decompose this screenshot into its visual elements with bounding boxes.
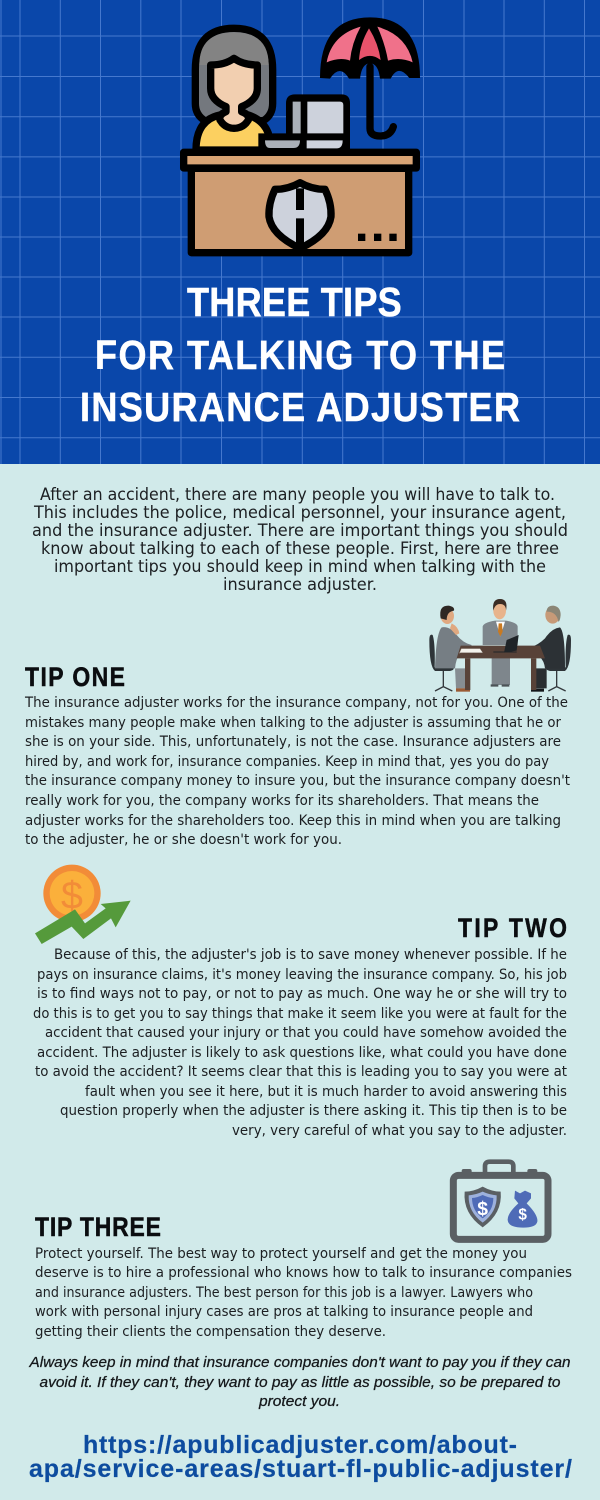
- closing note: Always keep in mind that insurance companies don't want to pay you if they can: [28, 1355, 570, 1371]
- tip two text: very, very careful of what you say to the adjuster.: [232, 1123, 567, 1139]
- intro text: important tips you should keep in mind when talking with the: [54, 557, 546, 577]
- tip two text: question properly when the adjuster is there asking it. This tip then is to be: [60, 1103, 567, 1119]
- tip two text: accident that caused your injury or that you could have somehow avoided the: [45, 1025, 567, 1041]
- tip three text: work with personal injury cases are pros at talking to insurance people and: [35, 1304, 533, 1320]
- tip three text: [35, 1246, 572, 1340]
- tip one text: hired by, and work for, insurance companies. Keep in mind that, yes you do pay: [25, 754, 549, 770]
- table: [457, 635, 545, 690]
- tip two text: do this is to get you to say things that make it seem like you were at fault for the: [33, 1006, 567, 1022]
- icon: briefcase with shield and money bag: [453, 1162, 548, 1239]
- tip two text: [33, 947, 567, 1139]
- tip one text: [24, 695, 570, 848]
- tip one text: adjuster works for the shareholders too. Keep this in mind when you are talking: [25, 813, 561, 829]
- man right: [524, 606, 565, 692]
- shield: [464, 1187, 501, 1227]
- header panel: [0, 0, 600, 464]
- title: [80, 280, 520, 431]
- icon: insurance agent at desk with umbrella: [184, 17, 420, 253]
- icon: coin with rising arrow: [35, 865, 131, 944]
- title: INSURANCE ADJUSTER: [80, 385, 520, 431]
- icon: briefcase with shield and money bag: $: [477, 1199, 488, 1220]
- chairs: [429, 635, 571, 671]
- intro text: know about talking to each of these people. First, here are three: [41, 539, 559, 559]
- tip two text: accident. The adjuster is likely to ask questions like, what could you have done: [37, 1045, 567, 1061]
- dollar sign: $: [61, 873, 83, 917]
- tip two text: Because of this, the adjuster's job is to save money whenever possible. If he: [54, 947, 567, 963]
- arrow: [35, 901, 131, 944]
- icon: business meeting: [429, 599, 571, 692]
- tip one text: The insurance adjuster works for the insurance company, not for you. One of the: [24, 695, 568, 711]
- tip three text: and insurance adjusters. The best person for this job is a lawyer. Lawyers who: [35, 1285, 533, 1301]
- website link: https://apublicadjuster.com/about-: [83, 1431, 517, 1459]
- tip one text: the insurance company money to insure you, but the insurance company doesn't: [25, 773, 570, 789]
- tip two text: pays on insurance claims, it's money leaving the insurance company. So, his job: [37, 967, 567, 983]
- tip two text: to avoid the accident? It seems clear that this is leading you to say you were at: [35, 1064, 567, 1080]
- tip three text: getting their clients the compensation they deserve.: [35, 1324, 386, 1340]
- tip two heading: TIP TWO: [458, 913, 567, 943]
- intro text: This includes the police, medical personnel, your insurance agent,: [33, 503, 566, 523]
- tip one text: mistakes many people make when talking to the adjuster is assuming that he or: [25, 715, 561, 731]
- tip one text: to the adjuster, he or she doesn't work for you.: [25, 832, 342, 848]
- money bag: [508, 1191, 537, 1228]
- title: FOR TALKING TO THE: [95, 333, 505, 379]
- tip three text: deserve is to hire a professional who knows how to talk to insurance companies: [35, 1265, 572, 1281]
- intro text: insurance adjuster.: [223, 575, 377, 595]
- intro text: and the insurance adjuster. There are important things you should: [32, 521, 568, 541]
- website link: apa/service-areas/stuart-fl-public-adjuster/: [29, 1455, 572, 1483]
- tip one text: really work for you, the company works for its shareholders. That means the: [25, 793, 539, 809]
- man centre: [483, 599, 518, 687]
- intro text: After an accident, there are many people you will have to talk to.: [40, 485, 555, 505]
- icon: person: [195, 28, 273, 150]
- closing note: avoid it. If they can't, they want to pay as little as possible, so be prepared to: [40, 1375, 560, 1391]
- tip three heading: TIP THREE: [35, 1212, 161, 1242]
- tip two text: is to find ways not to pay, or not to pay as much. One way he or she will try to: [37, 986, 567, 1002]
- icon: briefcase with shield and money bag: $: [518, 1206, 527, 1223]
- icon: desk: [184, 152, 416, 253]
- icon: shield: [269, 183, 331, 248]
- tip one heading: TIP ONE: [25, 662, 125, 692]
- man left: [435, 606, 472, 692]
- tip two text: fault when you see it here, but it is much harder to avoid answering this: [85, 1084, 567, 1100]
- tip one text: she is on your side. This, unfortunately, is not the case. Insurance adjusters are: [25, 734, 561, 750]
- tip three text: Protect yourself. The best way to protect yourself and get the money you: [35, 1246, 527, 1262]
- website link: [29, 1431, 572, 1483]
- closing note: [28, 1355, 570, 1410]
- closing note: protect you.: [258, 1394, 340, 1410]
- intro text: [32, 485, 568, 595]
- icon: laptop: [258, 94, 350, 152]
- icon: umbrella: [320, 17, 420, 136]
- title: THREE TIPS: [187, 280, 402, 326]
